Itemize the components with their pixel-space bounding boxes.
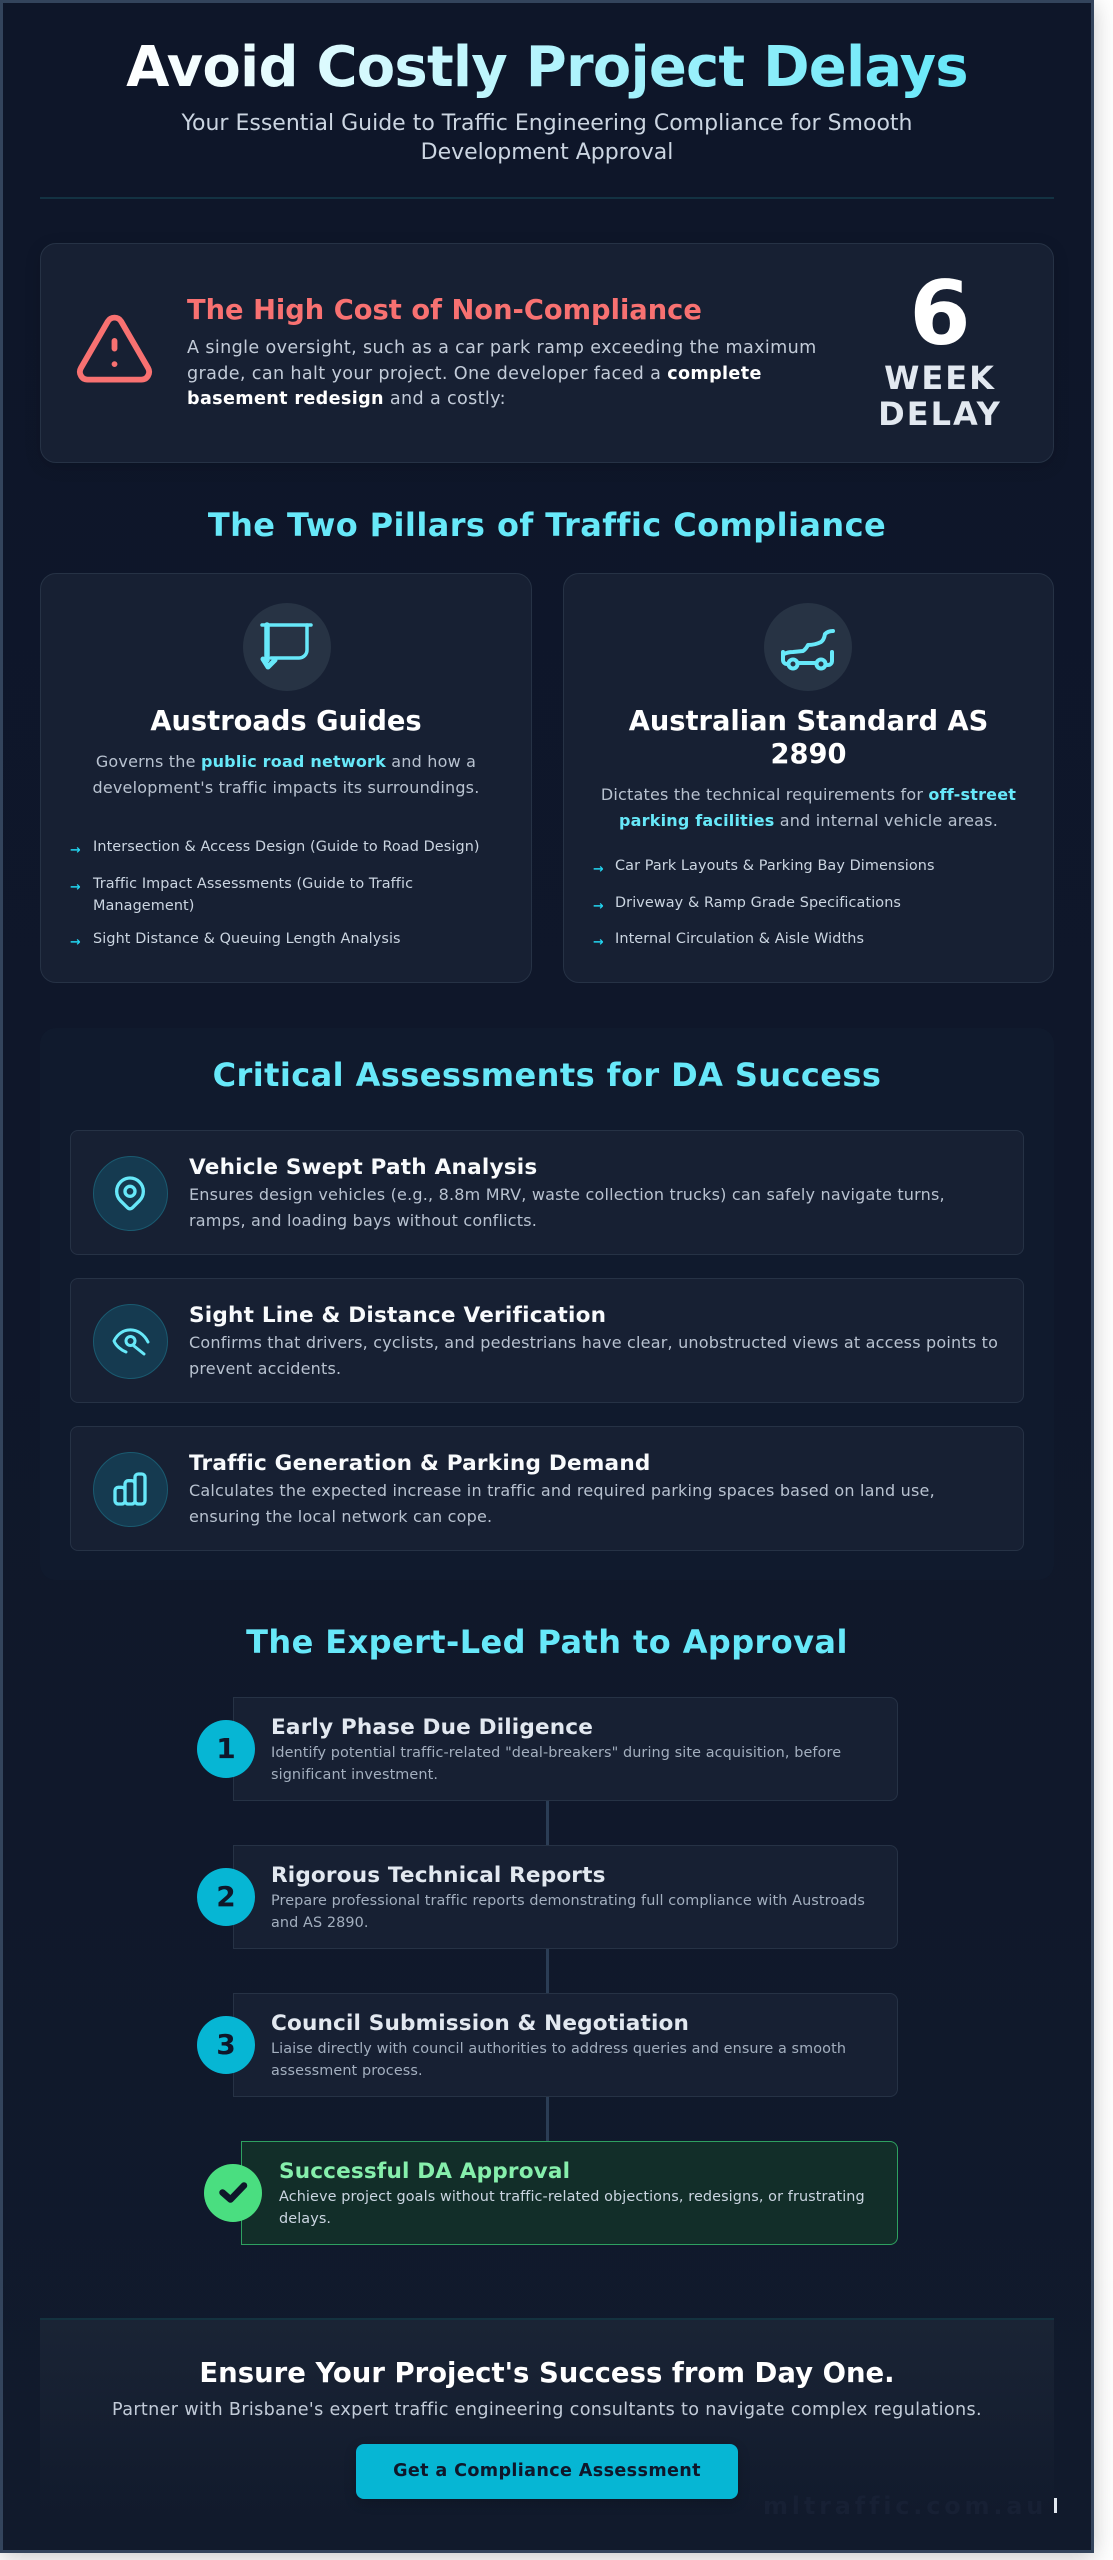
bullet 2: →: [593, 898, 604, 914]
card: sight line: [70, 1278, 1024, 1403]
bullet 3: →: [70, 935, 81, 950]
item description: Calculates the expected increase in traffic and required parking spaces based on land use,: [189, 1481, 935, 1500]
step title: Early Phase Due Diligence: [271, 1715, 593, 1740]
step description: [271, 1893, 865, 1931]
step description: [271, 2041, 846, 2079]
watermark: mltraffic.com.au: [763, 2492, 1047, 2520]
bullet 1: →: [70, 843, 81, 858]
icon: location pin: [93, 1156, 168, 1231]
item title: Traffic Generation & Parking Demand: [189, 1451, 651, 1476]
step 3 card: [233, 1993, 898, 2097]
step description: [271, 1745, 841, 1783]
bullet 2: [70, 876, 413, 914]
stat label: DELAY: [878, 395, 1002, 433]
icon: warning triangle: [76, 314, 152, 382]
connector 3: [546, 2097, 549, 2141]
card description: Governs the public road network and how a: [96, 752, 476, 771]
step 1 card: [233, 1697, 898, 1801]
card heading: [628, 706, 988, 770]
heading: critical assessments: Critical Assessments for DA Success: [213, 1056, 881, 1094]
heading: two pillars: The Two Pillars of Traffic Compliance: [208, 506, 886, 544]
item description: ensuring the local network can cope.: [189, 1507, 492, 1526]
final step description: delays.: [279, 2211, 331, 2227]
subtitle: Development Approval: [421, 140, 673, 165]
bullet 1: Car Park Layouts & Parking Bay Dimensions: [615, 858, 935, 874]
title: Avoid Costly Project Delays: [126, 35, 968, 100]
bullet 3: Internal Circulation & Aisle Widths: [615, 931, 864, 947]
final step description: Achieve project goals without traffic-related objections, redesigns, or frustrating: [279, 2189, 865, 2205]
step 2 card: [233, 1845, 898, 1949]
step 1 number: [197, 1720, 255, 1778]
item title: Vehicle Swept Path Analysis: [189, 1155, 537, 1180]
card heading: Austroads Guides: [150, 706, 422, 737]
card description: development's traffic impacts its surroundings.: [92, 778, 480, 797]
cta button: Get a Compliance Assessment: [393, 2461, 701, 2481]
card description: [92, 752, 480, 797]
bullet 2: →: [70, 880, 81, 894]
bullet 2: Management): [93, 898, 195, 914]
item description: Confirms that drivers, cyclists, and pedestrians have clear, unobstructed views at access points to: [189, 1333, 998, 1352]
header divider: [40, 197, 1054, 199]
item title: Sight Line & Distance Verification: [189, 1303, 606, 1328]
cursor mark: [1054, 2498, 1057, 2513]
item description: Ensures design vehicles (e.g., 8.8m MRV, waste collection trucks) can safely navigate turns,: [189, 1185, 945, 1204]
step description: and AS 2890.: [271, 1915, 369, 1931]
alert heading: The High Cost of Non-Compliance: [187, 295, 702, 326]
subtitle: [182, 111, 912, 165]
step description: assessment process.: [271, 2063, 423, 2079]
cta button: [356, 2444, 738, 2499]
final step description: [279, 2189, 865, 2227]
card description: parking facilities and internal vehicle areas.: [619, 811, 998, 830]
cta heading: Ensure Your Project's Success from Day One.: [199, 2357, 895, 2389]
cta text: Partner with Brisbane's expert traffic engineering consultants to navigate complex regulations.: [112, 2400, 982, 2420]
icon: bar chart: [93, 1452, 168, 1527]
panel: AS 2890: [563, 573, 1054, 983]
alert body text: grade, can halt your project. One developer faced a complete: [187, 364, 762, 384]
connector 1: [546, 1801, 549, 1845]
card heading: Australian Standard AS: [629, 706, 988, 737]
stat label: [878, 359, 1002, 433]
heading: path to approval: The Expert-Led Path to Approval: [246, 1623, 848, 1661]
bullet 1: Intersection & Access Design (Guide to Road Design): [93, 839, 480, 855]
card description: Dictates the technical requirements for off-street: [601, 785, 1016, 804]
step description: Identify potential traffic-related "deal-breakers" during site acquisition, before: [271, 1745, 841, 1761]
stat number: 6: [909, 262, 971, 365]
final step card: [241, 2141, 898, 2245]
alert body text: basement redesign and a costly:: [187, 389, 506, 409]
alert body text: A single oversight, such as a car park ramp exceeding the maximum: [187, 338, 817, 358]
panel: high cost of non-compliance: [40, 243, 1054, 463]
item description: [189, 1333, 998, 1378]
subtitle: Your Essential Guide to Traffic Engineering Compliance for Smooth: [182, 111, 912, 136]
final step check icon: [204, 2164, 262, 2222]
bullet 2: Traffic Impact Assessments (Guide to Traffic: [93, 876, 413, 892]
step 3 number: [197, 2016, 255, 2074]
step title: Rigorous Technical Reports: [271, 1863, 606, 1888]
step description: Prepare professional traffic reports demonstrating full compliance with Austroads: [271, 1893, 865, 1909]
panel: call to action: [40, 2318, 1054, 2518]
step 1 number: 1: [216, 1732, 236, 1765]
icon: road guide: [243, 603, 331, 691]
bullet 3: →: [593, 935, 604, 950]
connector 2: [546, 1949, 549, 1993]
item description: ramps, and loading bays without conflicts.: [189, 1211, 537, 1230]
step description: Liaise directly with council authorities to address queries and ensure a smooth: [271, 2041, 846, 2057]
step description: significant investment.: [271, 1767, 438, 1783]
step 2 number: [197, 1868, 255, 1926]
item description: [189, 1481, 935, 1526]
card: traffic generation: [70, 1426, 1024, 1551]
alert body text: [187, 338, 817, 409]
icon: eye: [93, 1304, 168, 1379]
bullet 3: Sight Distance & Queuing Length Analysis: [93, 931, 401, 947]
panel: critical assessments: [40, 1028, 1054, 1580]
panel: Austroads Guides: [40, 573, 532, 983]
card description: [601, 785, 1016, 830]
step title: Council Submission & Negotiation: [271, 2011, 689, 2036]
step 3 number: 3: [216, 2028, 236, 2061]
step 2 number: 2: [216, 1880, 236, 1913]
bullet list: [593, 858, 935, 950]
final step title: Successful DA Approval: [279, 2159, 570, 2184]
card heading: 2890: [770, 739, 846, 770]
stat label: WEEK: [884, 359, 996, 397]
stat: 6 week delay: [878, 262, 1002, 433]
bullet 2: Driveway & Ramp Grade Specifications: [615, 894, 901, 910]
item description: [189, 1185, 945, 1230]
icon: car: [764, 603, 852, 691]
item description: prevent accidents.: [189, 1359, 341, 1378]
bullet 1: →: [593, 862, 604, 877]
bullet list: [70, 839, 480, 950]
card: vehicle swept path: [70, 1130, 1024, 1255]
